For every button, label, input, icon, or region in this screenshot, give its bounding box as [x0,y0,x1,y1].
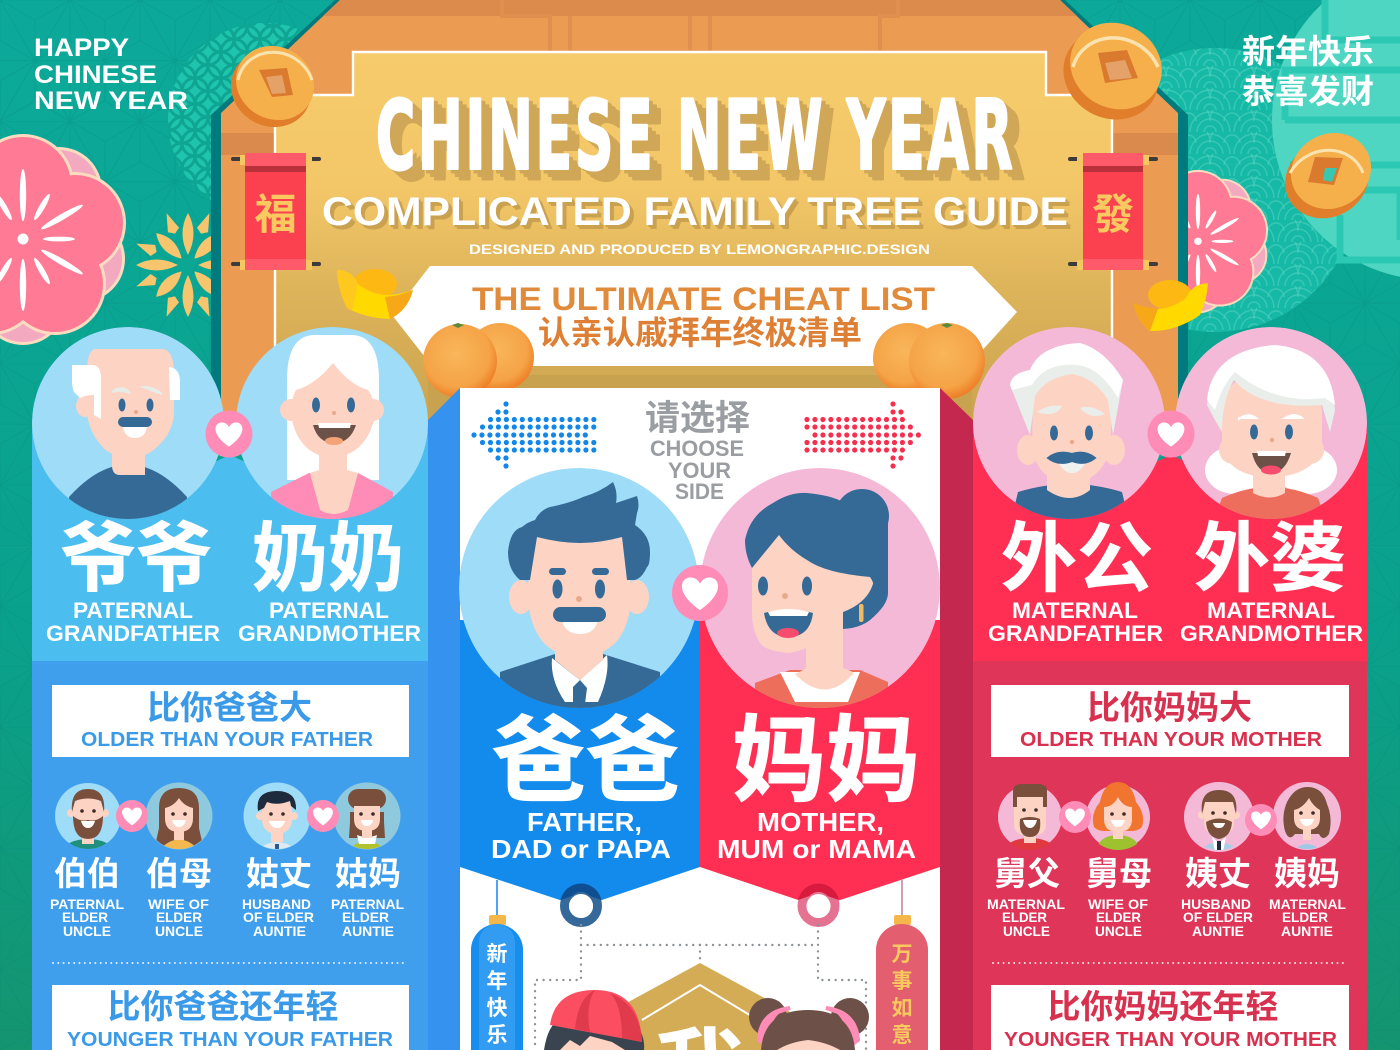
relatives: names and labels, maternal elder: ELDER [1096,909,1141,925]
icon: center heart [672,565,728,621]
label: mother [717,807,916,864]
coin: top right [1047,6,1178,137]
relatives: names and labels, maternal elder: 舅母 [1086,855,1152,892]
portrait: paternal grandfather [32,327,224,525]
icon: heart [1148,410,1194,458]
greeting: chinese: 恭喜发财 [1242,73,1374,110]
side strip: blue [428,388,460,1050]
greeting: happy chinese new year: CHINESE [34,61,157,89]
portrait: elder uncle [55,783,120,849]
relatives: names and labels, maternal elder: WIFE OF [1088,896,1148,912]
relatives: names and labels, maternal elder: ELDER [1282,909,1328,925]
scroll: fu: 福 [254,191,297,238]
arrow: right dotted [807,404,926,466]
portrait: wife of maternal elder uncle [1088,782,1150,850]
relatives: names and labels, paternal elder: ELDER [342,909,389,925]
relatives: names and labels, paternal elder: UNCLE [155,923,203,939]
coin: top left [217,32,328,142]
relatives: names and labels, paternal elder: AUNTIE [253,923,306,939]
relatives: names and labels, maternal elder: AUNTIE [1281,923,1333,939]
ribbon: cheat list [392,266,1017,366]
label: father: DAD or PAPA [491,834,671,864]
scroll: fa [1068,153,1158,270]
ribbon: cheat list: 认亲认戚拜年终极清单 [538,315,862,351]
oranges: right [873,323,985,399]
center prompt: choose your side [645,399,750,504]
label: mother: MUM or MAMA [717,834,916,864]
name: waipo: 外婆 [1194,517,1346,602]
portrait: husband of maternal elder auntie [1184,782,1254,857]
lantern: red [876,880,928,1050]
flower: yellow [134,211,242,319]
label: father: FATHER, [527,807,642,837]
icon: heart [307,800,339,832]
house frame [211,0,1188,440]
oranges: left [423,323,534,398]
relatives: names and labels, paternal elder: OF ELDER [243,909,314,925]
relatives: names and labels, maternal elder: 姨妈 [1274,855,1340,892]
relatives: names and labels, maternal elder: 姨丈 [1185,855,1251,892]
center prompt: choose your side: 请选择 [645,399,750,438]
center prompt: choose your side: YOUR [668,458,731,483]
relatives: names and labels, maternal elder: AUNTIE [1192,923,1244,939]
relatives: names and labels, paternal elder: AUNTIE [342,923,394,939]
lantern: red: 事 [892,969,912,993]
icon: heart [1245,804,1277,836]
box: younger than mother: 比你妈妈还年轻 [1048,988,1278,1025]
portrait: mother [700,468,940,720]
panel: maternal grandparents [973,327,1367,1050]
box: younger than mother [991,985,1349,1050]
relatives: names and labels, paternal elder [50,855,404,939]
portrait: husband of elder auntie [244,782,310,850]
child: girl [749,998,869,1050]
relatives: names and labels, paternal elder: 姑妈 [335,855,401,892]
lantern: blue: 年 [486,970,508,993]
portrait: maternal elder auntie [1273,782,1341,856]
credit line: DESIGNED AND PRODUCED BY LEMONGRAPHIC.DESIGN [469,241,930,257]
lantern: blue: 快 [486,997,508,1020]
name: waipo: GRANDMOTHER [1180,621,1363,646]
relatives: names and labels, maternal elder: ELDER [1002,909,1047,925]
lantern: red: 万 [892,943,912,966]
box: older than mother [991,685,1349,757]
relatives: names and labels, paternal elder: PATERNAL [50,896,124,912]
name: nainai: 奶奶 [252,517,404,602]
center prompt: choose your side: CHOOSE [650,436,744,461]
name: mama: 妈妈 [732,708,920,813]
scroll: fu [231,153,321,270]
name: nainai: GRANDMOTHER [238,621,421,646]
lantern: blue: 新 [486,942,508,966]
side strip: red [940,388,973,1050]
box: older than father: 比你爸爸大 [147,689,312,726]
icon: heart [1059,801,1091,833]
name: nainai: PATERNAL [269,598,389,623]
greeting: happy chinese new year: NEW YEAR [34,87,188,115]
greeting: chinese [1242,33,1374,110]
name: yeye: PATERNAL [73,598,193,623]
name: waipo [1180,517,1363,646]
relatives: names and labels, paternal elder: PATERNAL [331,896,404,912]
relatives: names and labels, maternal elder [987,855,1346,939]
greeting: happy chinese new year: HAPPY [34,34,129,62]
name: nainai [238,517,421,646]
ring: father [560,884,602,922]
lantern: blue: 乐 [486,1024,508,1047]
relatives: names and labels, paternal elder: UNCLE [63,923,111,939]
name: waipo: MATERNAL [1207,598,1335,623]
coin: far right [1271,118,1385,233]
center badge: me [610,963,790,1050]
gold title panel [275,52,1112,440]
relatives: names and labels, maternal elder: UNCLE [1095,923,1142,939]
portrait: maternal elder uncle [998,784,1061,850]
box: older than father [52,685,409,757]
name: yeye [46,517,220,646]
relatives: names and labels, maternal elder: OF ELDER [1183,909,1253,925]
relatives: names and labels, paternal elder: 姑丈 [246,855,312,892]
greeting: chinese: 新年快乐 [1242,33,1374,70]
lantern: red: 如 [892,997,912,1020]
ingot: left [337,269,413,319]
name: waigong: GRANDFATHER [988,621,1163,646]
portrait: father [459,468,699,720]
center gold wedge [428,375,972,425]
ring: mother [798,884,839,922]
portrait: wife of elder uncle [146,782,212,856]
child: boy [544,990,644,1050]
ingot: right [1133,280,1208,331]
relatives: names and labels, paternal elder: 伯母 [146,855,212,892]
scroll: fa: 發 [1092,191,1134,238]
ribbon: cheat list: THE ULTIMATE CHEAT LIST [472,281,935,317]
arrow: left dotted [474,404,594,466]
title: CHINESE NEW YEAR [376,81,1015,192]
name: waigong [988,517,1163,646]
panel: father [459,468,700,907]
relatives: names and labels, maternal elder: 舅父 [994,855,1060,892]
relatives: names and labels, paternal elder: ELDER [62,909,108,925]
lantern: red: 意 [892,1023,912,1047]
portrait: elder auntie [335,782,400,850]
panel: paternal grandparents [32,327,428,1050]
portrait: paternal grandmother [236,327,428,530]
label: father [491,807,671,864]
portrait: maternal grandfather [973,327,1165,525]
label: mother: MOTHER, [757,807,884,837]
box: older than mother: 比你妈妈大 [1087,689,1252,726]
box: older than father: OLDER THAN YOUR FATHER [81,729,374,751]
relatives: names and labels, maternal elder: MATERNAL [987,896,1065,912]
name: baba: 爸爸 [492,708,680,813]
flower: right pink [1128,170,1268,313]
relatives: names and labels, paternal elder: HUSBAND [242,896,311,912]
relatives: names and labels, maternal elder: UNCLE [1003,923,1050,939]
box: younger than father: 比你爸爸还年轻 [108,988,338,1025]
name: yeye: GRANDFATHER [46,621,220,646]
center white column [460,388,940,1050]
family tree connectors [535,925,866,1049]
flower: left pink [0,134,126,345]
subtitle: COMPLICATED FAMILY TREE GUIDE [322,190,1068,234]
panel: mother [700,468,940,907]
relatives: names and labels, maternal elder: MATERNAL [1269,896,1346,912]
relatives: names and labels, paternal elder: 伯伯 [54,855,120,892]
box: older than mother: OLDER THAN YOUR MOTHER [1020,729,1323,751]
name: waigong: MATERNAL [1012,598,1138,623]
decoration: patterned circles [168,0,1400,332]
greeting: happy chinese new year [34,34,188,115]
name: waigong: 外公 [1001,517,1153,602]
lantern: blue [471,880,523,1050]
name: yeye: 爷爷 [60,517,212,602]
portrait: maternal grandmother [1175,327,1367,530]
icon: heart [206,410,252,458]
center prompt: choose your side: SIDE [675,479,724,504]
relatives: names and labels, paternal elder: ELDER [156,909,202,925]
box: younger than father [52,985,409,1050]
relatives: names and labels, maternal elder: HUSBAND [1181,896,1251,912]
relatives: names and labels, paternal elder: WIFE OF [148,896,209,912]
icon: heart [116,800,148,832]
